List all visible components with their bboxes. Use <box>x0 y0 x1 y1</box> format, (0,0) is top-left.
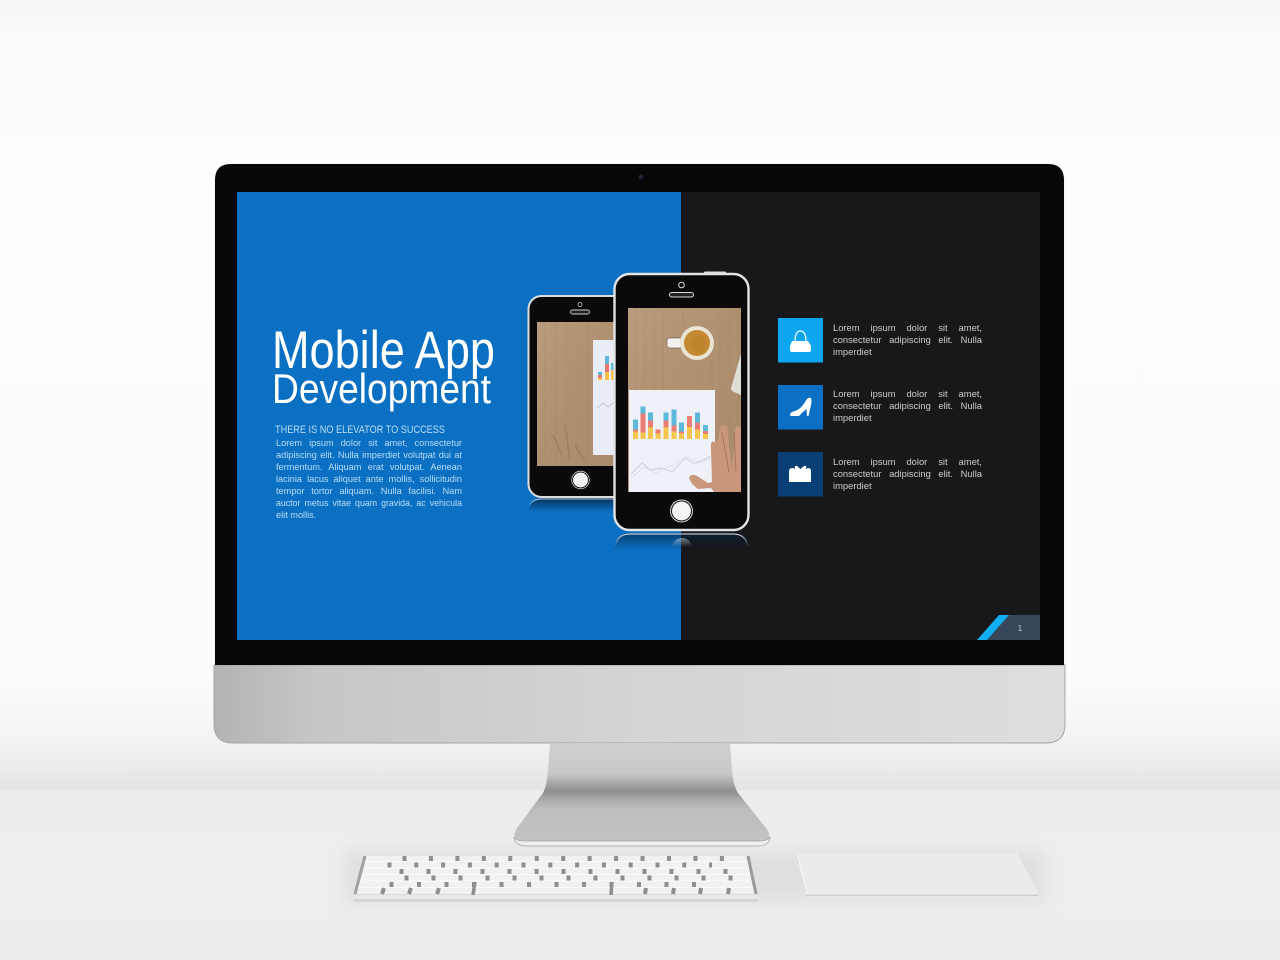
feature text 3: consectetur adipiscing elit. Nulla <box>833 468 982 479</box>
left body text: lacinia lacus aliquet ante mollis, sollicitudin <box>276 474 462 484</box>
wood desk <box>628 308 741 492</box>
heel <box>790 398 812 416</box>
large phone body <box>614 274 748 530</box>
feature text 3 <box>833 456 982 491</box>
bar chart <box>633 406 708 439</box>
feature text 1 <box>833 322 982 357</box>
feature text 2 <box>833 388 982 423</box>
feature text 1: imperdiet <box>833 346 872 357</box>
left body text: fermentum. Aliquam erat volutpat. Aenean <box>276 462 462 472</box>
slide: blue panel <box>237 192 681 640</box>
keyboard <box>353 855 758 902</box>
left body text: Lorem ipsum dolor sit amet, consectetur <box>276 438 462 448</box>
keyboard shadow <box>354 899 758 902</box>
monitor chin <box>214 665 1065 743</box>
paper <box>629 390 715 492</box>
monitor <box>214 163 1065 743</box>
tile <box>778 385 823 430</box>
small phone speaker <box>570 310 590 314</box>
keyboard body <box>353 855 758 899</box>
title line 1: Mobile App <box>272 321 495 380</box>
small phone home button <box>573 472 588 488</box>
subtitle: THERE IS NO ELEVATOR TO SUCCESS <box>275 424 445 436</box>
box <box>789 466 811 482</box>
monitor stand <box>514 744 770 846</box>
monitor bezel <box>215 164 1064 665</box>
feature icon 3: gift box <box>778 452 823 496</box>
trackpad rim <box>797 853 1037 894</box>
left body text <box>276 438 462 520</box>
title <box>272 321 495 412</box>
trackpad shadow <box>806 896 1038 899</box>
small phone reflection <box>529 498 614 512</box>
page number tab <box>977 615 1040 640</box>
blue stripe <box>977 615 1009 640</box>
trackpad <box>797 853 1038 899</box>
tablet corner <box>731 354 741 395</box>
title line 2: Development <box>272 365 491 412</box>
tile <box>778 452 823 496</box>
large phone screen photo <box>628 308 741 492</box>
line chart <box>631 456 711 474</box>
tile <box>778 318 823 362</box>
keyboard key plate <box>356 856 756 894</box>
trackpad edge <box>806 894 1038 896</box>
left body text: elit mollis. <box>276 510 316 520</box>
monitor outer rim <box>214 163 1065 665</box>
trackpad surface <box>797 853 1038 894</box>
feature icon 2: high heel <box>778 385 823 430</box>
hand <box>689 425 741 492</box>
small phone camera <box>578 302 582 306</box>
small phone body <box>528 296 628 497</box>
feature text 3: imperdiet <box>833 480 872 491</box>
coffee cup <box>667 326 714 360</box>
feature text 2: imperdiet <box>833 412 872 423</box>
feature text 2: Lorem ipsum dolor sit amet, <box>833 388 982 399</box>
left body text: tempor tortor aliquam. Nulla facilisi. Nam <box>276 486 462 496</box>
feature text 3: Lorem ipsum dolor sit amet, <box>833 456 982 467</box>
left body text: auctor metus vitae quam gravida, ac vehicula <box>276 498 462 508</box>
page number: 1 <box>1018 624 1023 633</box>
large phone <box>614 272 749 550</box>
small phone <box>528 295 614 511</box>
feature text 1: consectetur adipiscing elit. Nulla <box>833 334 982 345</box>
bag <box>790 341 811 352</box>
tab background <box>987 615 1040 640</box>
large phone home button <box>672 502 691 520</box>
camera <box>638 174 644 180</box>
small phone screen photo <box>537 322 617 466</box>
large phone reflection <box>614 533 749 550</box>
large phone camera <box>679 282 684 288</box>
large phone speaker <box>670 292 694 297</box>
feature icon 1: handbag <box>778 318 823 362</box>
keyboard front edge <box>353 895 758 899</box>
large phone side button <box>704 272 726 274</box>
feature text 1: Lorem ipsum dolor sit amet, <box>833 322 982 333</box>
slide: dark panel <box>681 192 1040 640</box>
feature text 2: consectetur adipiscing elit. Nulla <box>833 400 982 411</box>
left body text: adipiscing elit. Nulla imperdiet volutpat dui at <box>276 450 462 460</box>
key gaps <box>355 856 756 895</box>
key rows <box>357 862 755 888</box>
